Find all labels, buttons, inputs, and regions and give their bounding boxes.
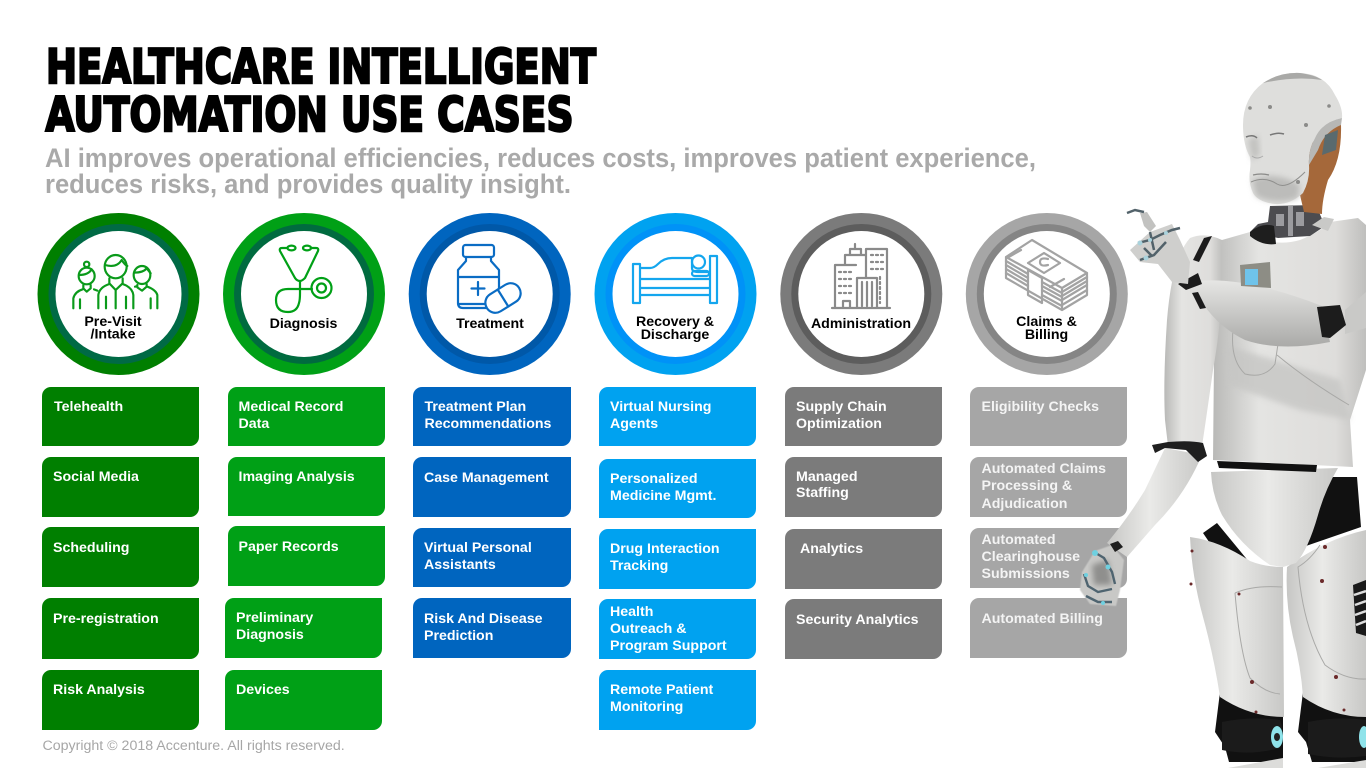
robot left upper arm	[1164, 235, 1222, 446]
item: Automated Clearinghouse Submissions: Automated	[982, 532, 1056, 548]
item: Automated Clearinghouse Submissions: Submissions	[982, 566, 1070, 582]
item: Preliminary Diagnosis: Diagnosis	[236, 627, 304, 643]
category: Diagnosis circle	[223, 213, 385, 375]
category: Pre-Visit/Intake circle	[38, 213, 200, 375]
item: Personalized Medicine Mgmt.: Personalized	[610, 471, 698, 487]
title	[46, 40, 596, 143]
item: Remote Patient Monitoring: Remote Patient	[610, 682, 713, 698]
item: Supply Chain Optimization: Optimization	[796, 416, 882, 432]
item: Virtual Personal Assistants: Virtual Personal	[424, 540, 532, 556]
item: Automated Billing	[970, 598, 1127, 658]
item: Preliminary Diagnosis	[225, 598, 382, 658]
item: Devices: Devices	[236, 682, 290, 698]
item: Virtual Nursing Agents: Agents	[610, 416, 658, 432]
item: Analytics	[785, 529, 942, 589]
icon: office buildings	[832, 244, 890, 308]
item: Devices	[225, 670, 382, 730]
item: Social Media	[42, 457, 199, 517]
icon: hospital bed	[633, 256, 717, 303]
item: Case Management: Case Management	[424, 470, 549, 486]
label: Diagnosis	[270, 316, 338, 332]
robot head	[1243, 73, 1342, 204]
item: Paper Records	[228, 526, 385, 586]
item: Virtual Personal Assistants: Assistants	[424, 557, 496, 573]
item: Virtual Personal Assistants	[413, 528, 571, 587]
column: Diagnosis items	[225, 387, 385, 730]
robot lower forearm	[1107, 441, 1207, 557]
label: Billing	[1025, 327, 1068, 343]
robot wiring	[1300, 125, 1341, 214]
item: Risk And Disease Prediction	[413, 598, 571, 658]
title: HEALTHCARE INTELLIGENT	[46, 40, 596, 95]
item: Automated Claims Processing & Adjudication: Automated Claims	[982, 461, 1106, 477]
item: Treatment Plan Recommendations: Treatment Plan	[424, 399, 526, 415]
item: Treatment Plan Recommendations	[413, 387, 571, 446]
label: Claims &	[1016, 314, 1077, 330]
item: Drug Interaction Tracking: Drug Interaction	[610, 541, 720, 557]
category: Administration circle	[780, 213, 942, 375]
robot pelvis	[1211, 468, 1338, 567]
item: Health Outreach & Program Support: Health	[610, 604, 653, 620]
category: Recovery & Discharge circle	[594, 213, 756, 375]
item: Risk And Disease Prediction: Risk And Disease	[424, 611, 543, 627]
column: Pre-Visit/Intake items	[42, 387, 199, 730]
item: Supply Chain Optimization: Supply Chain	[796, 399, 887, 415]
item: Drug Interaction Tracking	[599, 529, 756, 589]
item: Automated Billing: Automated Billing	[982, 611, 1103, 627]
label: Administration	[811, 316, 911, 332]
item: Scheduling	[42, 527, 199, 587]
category: Treatment circle	[409, 213, 571, 375]
label: Pre-Visit	[84, 314, 142, 330]
item: Personalized Medicine Mgmt.	[599, 459, 756, 518]
subtitle: AI improves operational efficiencies, reduces costs, improves patient experience,	[45, 143, 1036, 173]
item: Medical Record Data: Medical Record	[238, 399, 343, 415]
item: Eligibility Checks	[970, 387, 1127, 446]
copyright: Copyright © 2018 Accenture. All rights reserved.	[42, 738, 345, 754]
item: Security Analytics	[785, 599, 942, 659]
label: /Intake	[91, 326, 136, 342]
item: Case Management	[413, 457, 571, 517]
item: Drug Interaction Tracking: Tracking	[610, 558, 668, 574]
robot neck	[1250, 205, 1334, 244]
illustration: humanoid robot	[1080, 73, 1366, 768]
item: Remote Patient Monitoring	[599, 670, 756, 730]
item: Virtual Nursing Agents: Virtual Nursing	[610, 399, 711, 415]
icon: stack of money	[1006, 240, 1087, 310]
item: Health Outreach & Program Support: Program Support	[610, 638, 727, 654]
column: Administration items	[785, 387, 942, 659]
item: Managed Staffing: Managed	[796, 469, 858, 485]
item: Medical Record Data	[228, 387, 385, 446]
item: Imaging Analysis	[228, 457, 385, 516]
icon: people	[73, 255, 157, 308]
item: Personalized Medicine Mgmt.: Medicine Mgmt.	[610, 488, 716, 504]
item: Automated Claims Processing & Adjudication: Processing &	[982, 478, 1072, 494]
subtitle: reduces risks, and provides quality insight.	[45, 169, 571, 199]
robot torso	[1200, 218, 1366, 472]
icon: stethoscope	[276, 246, 332, 312]
item: Managed Staffing: Staffing	[796, 485, 849, 501]
robot raised hand	[1127, 210, 1190, 284]
subtitle	[45, 143, 1036, 199]
item: Preliminary Diagnosis: Preliminary	[236, 610, 313, 626]
column: Treatment items	[413, 387, 571, 658]
icon: medicine bottle and pill	[458, 245, 524, 317]
item: Telehealth: Telehealth	[54, 399, 123, 415]
item: Automated Claims Processing & Adjudication: Adjudication	[982, 496, 1067, 512]
item: Risk Analysis	[42, 670, 199, 730]
item: Pre-registration: Pre-registration	[53, 611, 159, 627]
item: Automated Clearinghouse Submissions: Clearinghouse	[982, 549, 1080, 565]
label: Treatment	[456, 316, 524, 332]
item: Paper Records: Paper Records	[238, 539, 339, 555]
item: Security Analytics: Security Analytics	[796, 612, 919, 628]
item: Eligibility Checks: Eligibility Checks	[982, 399, 1099, 415]
robot legs	[1190, 477, 1366, 768]
title: AUTOMATION USE CASES	[46, 88, 574, 143]
item: Automated Claims Processing & Adjudication	[970, 457, 1127, 517]
item: Supply Chain Optimization	[785, 387, 942, 446]
item: Treatment Plan Recommendations: Recommendations	[424, 416, 552, 432]
item: Automated Clearinghouse Submissions	[970, 528, 1127, 588]
item: Risk Analysis: Risk Analysis	[53, 682, 145, 698]
robot raised forearm	[1178, 236, 1366, 347]
robot lower hand	[1080, 541, 1124, 606]
item: Telehealth	[42, 387, 199, 446]
label: Discharge	[641, 327, 709, 343]
item: Remote Patient Monitoring: Monitoring	[610, 699, 683, 715]
item: Risk And Disease Prediction: Prediction	[424, 628, 493, 644]
item: Scheduling: Scheduling	[53, 540, 129, 556]
item: Health Outreach & Program Support: Outreach &	[610, 621, 686, 637]
item: Virtual Nursing Agents	[599, 387, 756, 446]
robot chest screen	[1240, 262, 1271, 288]
item: Medical Record Data: Data	[238, 416, 269, 432]
column: Claims & Billing items	[970, 387, 1127, 658]
column: Recovery & Discharge items	[599, 387, 756, 730]
item: Imaging Analysis: Imaging Analysis	[238, 469, 355, 485]
item: Analytics: Analytics	[800, 541, 863, 557]
item: Pre-registration	[42, 598, 199, 659]
item: Health Outreach & Program Support	[599, 599, 756, 659]
item: Managed Staffing	[785, 457, 942, 517]
label: Recovery &	[636, 314, 714, 330]
category: Claims & Billing circle	[966, 213, 1128, 375]
item: Social Media: Social Media	[53, 469, 139, 485]
